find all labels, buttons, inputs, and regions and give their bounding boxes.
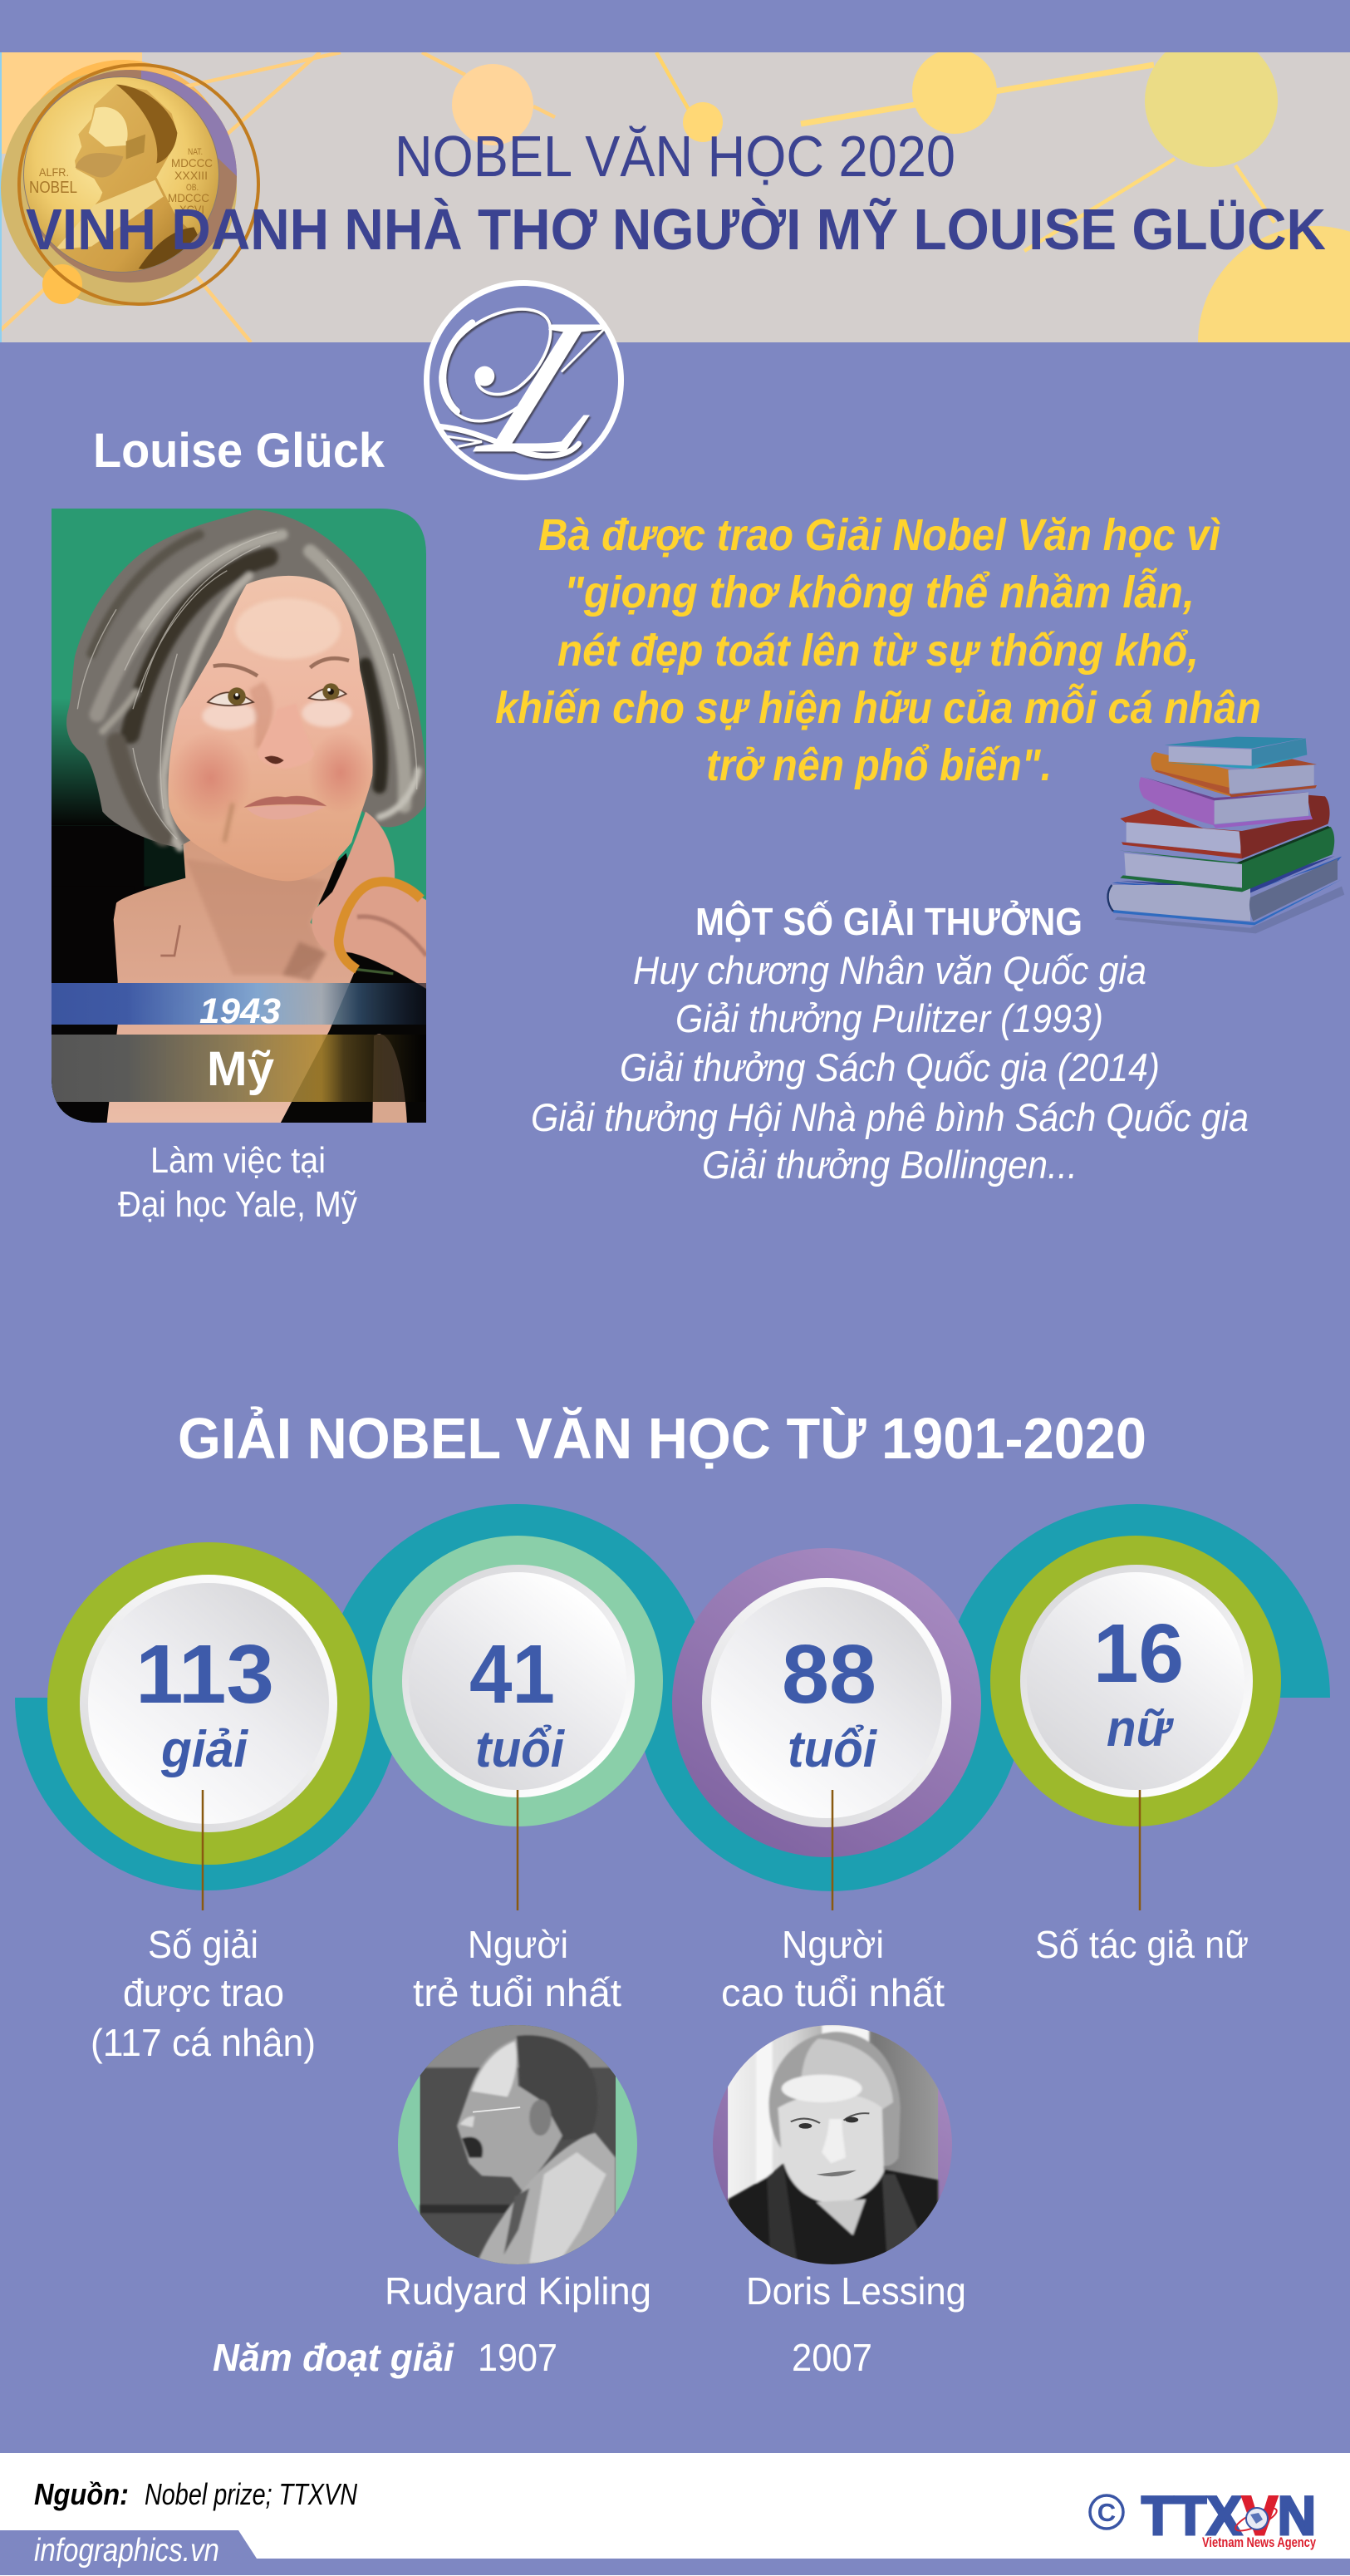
source: Nobel prize; TTXVN	[145, 2477, 358, 2511]
citation quote: trở nên phổ biến".	[706, 740, 1052, 790]
award year row	[213, 2336, 872, 2379]
caption: prizes awarded: Số giải	[148, 1923, 258, 1966]
citation quote: Bà được trao Giải Nobel Văn học vì	[538, 510, 1220, 560]
nose and mouth	[259, 733, 294, 766]
workplace caption: Làm việc tại	[150, 1140, 326, 1181]
citation quote: khiến cho sự hiện hữu của mỗi cá nhân	[495, 683, 1261, 733]
medal inscriptions: XXXIII	[174, 169, 208, 182]
section heading: GIẢI NOBEL VĂN HỌC TỪ 1901-2020	[178, 1406, 1146, 1471]
dark clothing	[728, 2163, 938, 2269]
medal inscriptions: NAT.	[188, 147, 203, 157]
award year row: Năm đoạt giải	[213, 2336, 454, 2379]
logo: TTXVN: C	[1097, 2498, 1116, 2527]
awards items: Giải thưởng Hội Nhà phê bình Sách Quốc gia	[531, 1095, 1249, 1139]
stat: 113 prizes: giải	[160, 1721, 249, 1778]
stat: 113 prizes: 113	[135, 1628, 274, 1721]
caption: prizes awarded	[91, 1923, 316, 2064]
website tab: infographics.vn	[34, 2533, 219, 2569]
stat: 88 years: 88	[782, 1628, 876, 1721]
caption: oldest	[721, 1923, 945, 2014]
stat: 88 years	[672, 1548, 981, 1857]
stat: 16 women	[990, 1536, 1281, 1826]
medal inscriptions: MDCCC	[171, 156, 213, 170]
stat: 16 women: nữ	[1107, 1700, 1174, 1757]
icon: stack of books	[1108, 737, 1344, 933]
logo: TTXVN: Vietnam News Agency	[1202, 2534, 1316, 2550]
header band	[0, 52, 1350, 342]
hair	[768, 2032, 901, 2166]
caption: women authors: Số tác giả nữ	[1035, 1923, 1249, 1966]
teal book	[1165, 737, 1304, 749]
citation quote: "giọng thơ không thể nhầm lẫn,	[564, 568, 1195, 617]
caption: prizes awarded: được trao	[123, 1971, 284, 2014]
stat: 88 years: tuổi	[788, 1721, 878, 1778]
medal inscriptions: NOBEL	[29, 179, 77, 197]
citation quote	[495, 510, 1261, 790]
names of laureates	[385, 2269, 966, 2313]
awards heading: MỘT SỐ GIẢI THƯỞNG	[695, 900, 1082, 943]
country band	[52, 1035, 426, 1102]
source: Nguồn:	[34, 2477, 129, 2511]
workplace caption: Đại học Yale, Mỹ	[118, 1184, 357, 1225]
stat: 16 women: 16	[1093, 1607, 1184, 1700]
names of laureates: Doris Lessing	[746, 2269, 966, 2313]
purple book	[1139, 777, 1215, 825]
logo: TTXVN: TTXVN	[1141, 2485, 1316, 2546]
face	[778, 2093, 884, 2204]
header network decoration	[2, 52, 1350, 342]
awards items: Giải thưởng Sách Quốc gia (2014)	[620, 1045, 1160, 1089]
medal inscriptions: MDCCC	[168, 191, 209, 204]
connector lines	[203, 1790, 1140, 1910]
teal wave	[15, 1504, 1330, 1891]
awards items: Huy chương Nhân văn Quốc gia	[633, 948, 1146, 992]
caption: oldest: cao tuổi nhất	[721, 1971, 945, 2014]
hand and arm	[312, 812, 426, 989]
brows and eyes	[214, 658, 349, 676]
name: Louise Glück: Louise Glück	[93, 424, 385, 478]
footer	[0, 2453, 1350, 2576]
statistics ribbon	[15, 1504, 1330, 1910]
caption: youngest	[413, 1923, 621, 2014]
monogram letter with flourish: L	[454, 278, 660, 494]
birth year: 1943	[199, 991, 281, 1031]
names of laureates: Rudyard Kipling	[385, 2269, 651, 2313]
stat: 41 years	[372, 1536, 663, 1826]
orange book	[1151, 752, 1231, 796]
caption: youngest: Người	[468, 1923, 568, 1966]
stat: 41 years: 41	[469, 1628, 555, 1721]
stat: 113 prizes	[47, 1542, 370, 1865]
medal inscriptions: XCVI	[179, 203, 204, 216]
medal inscriptions: ALFR.	[39, 165, 69, 179]
portrait: Doris Lessing	[713, 2019, 952, 2269]
portrait: Rudyard Kipling	[398, 2019, 637, 2269]
green book	[1119, 827, 1334, 892]
face	[168, 576, 373, 881]
caption: oldest: Người	[782, 1923, 884, 1966]
medal inscriptions	[29, 147, 213, 216]
awards items	[531, 948, 1249, 1187]
stat: 41 years: tuổi	[475, 1721, 566, 1778]
monogram badge L	[425, 278, 660, 494]
hair	[66, 509, 426, 848]
caption: youngest: trẻ tuổi nhất	[413, 1971, 621, 2014]
award year row: 2007	[792, 2336, 872, 2379]
country: Mỹ	[207, 1042, 274, 1096]
icon: Nobel medal	[1, 65, 258, 306]
bracelet	[339, 882, 421, 970]
medal inscriptions: OB.	[186, 183, 199, 193]
caption: prizes awarded: (117 cá nhân)	[91, 2021, 316, 2064]
award year row: 1907	[478, 2336, 557, 2379]
awards items: Giải thưởng Bollingen...	[702, 1143, 1078, 1187]
citation quote: nét đẹp toát lên từ sự thống khổ,	[557, 626, 1199, 676]
workplace caption	[118, 1140, 357, 1225]
source	[34, 2477, 358, 2511]
title line 1: NOBEL VĂN HỌC 2020	[395, 124, 955, 189]
year band	[52, 983, 426, 1025]
website tab	[0, 2530, 1350, 2575]
neck and chest	[106, 839, 355, 1124]
awards list	[531, 900, 1249, 1187]
blue book	[1112, 857, 1342, 895]
red book	[1120, 809, 1242, 858]
portrait panel: Louise Glück	[52, 509, 426, 1136]
awards items: Giải thưởng Pulitzer (1993)	[675, 996, 1103, 1040]
